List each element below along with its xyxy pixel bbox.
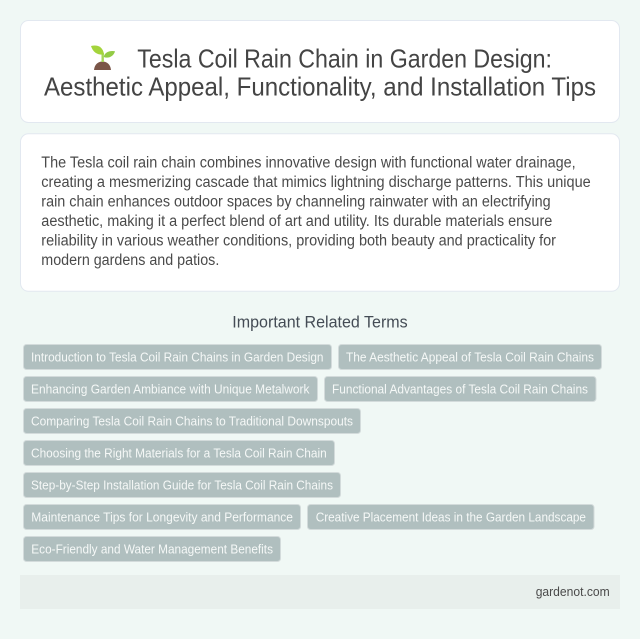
tag: Eco-Friendly and Water Management Benefits [31,542,273,556]
tag: Comparing Tesla Coil Rain Chains to Traditional Downspouts [31,414,353,428]
tag [24,344,332,370]
title: Aesthetic Appeal, Functionality, and Installation Tips [44,72,596,102]
tag [24,536,280,562]
tag [24,440,334,466]
tag: Choosing the Right Materials for a Tesla Coil Rain Chain [31,446,327,460]
tag: Creative Placement Ideas in the Garden Landscape [316,510,586,524]
tag: Maintenance Tips for Longevity and Performance [31,510,293,524]
description text [41,155,591,269]
panel: related term tags [24,344,602,562]
tag [324,376,596,402]
icon: seedling [91,46,115,70]
tag: Introduction to Tesla Coil Rain Chains in Garden Design [31,350,324,364]
title: Tesla Coil Rain Chain in Garden Design: [137,43,552,73]
tag [24,504,300,530]
tag [24,376,318,402]
description text: creating a mesmerizing cascade that mimics lightning discharge patterns. This unique [41,174,591,191]
description text: rain chain enhances outdoor spaces by channeling rainwater with an electrifying [41,194,551,211]
panel: title card [20,20,620,122]
tag [24,472,340,498]
description text: The Tesla coil rain chain combines innovative design with functional water drainage, [41,155,576,172]
footer source text: gardenot.com [536,584,610,599]
heading: related terms: Important Related Terms [232,313,408,331]
tag: The Aesthetic Appeal of Tesla Coil Rain Chains [346,350,594,364]
tag [338,344,602,370]
description text: aesthetic, making it a perfect blend of art and utility. Its durable materials ensure [41,213,552,230]
tag: Functional Advantages of Tesla Coil Rain Chains [332,382,588,396]
tag [308,504,594,530]
panel: description card [20,134,620,291]
tag: Step-by-Step Installation Guide for Tesla Coil Rain Chains [31,478,333,492]
footer [20,575,620,609]
tag [24,408,360,434]
description text: modern gardens and patios. [41,252,219,269]
description text: reliability in various weather conditions, providing both beauty and practicality for [41,233,556,250]
tag: Enhancing Garden Ambiance with Unique Metalwork [31,382,310,396]
title [44,43,596,102]
